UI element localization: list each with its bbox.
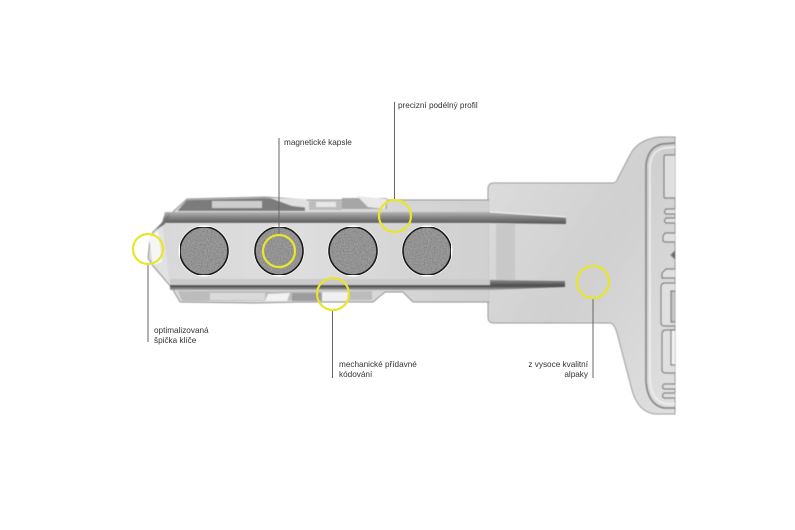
key illustration xyxy=(148,137,675,414)
callout: magnetické kapsle xyxy=(263,138,352,267)
lower groove xyxy=(170,280,565,290)
callout: z vysoce kvalitní alpaky: z vysoce kvalitní xyxy=(528,360,589,369)
embossed markings xyxy=(661,155,675,398)
blade tip xyxy=(150,213,170,285)
callout: optimalizovaná špička klíče: optimalizovaná xyxy=(154,326,209,335)
callout: mechanické přídavné kódování: mechanické přídavné xyxy=(339,360,417,369)
callout: z vysoce kvalitní alpaky: alpaky xyxy=(564,370,589,379)
callout: precizní podélný profil xyxy=(379,101,478,232)
key blade xyxy=(148,196,566,303)
magnetic capsules xyxy=(178,226,452,276)
callout: mechanické přídavné kódování: kódování xyxy=(339,370,373,379)
upper groove xyxy=(162,212,566,224)
callout: magnetické kapsle: magnetické kapsle xyxy=(284,138,352,147)
lower edge relief xyxy=(178,291,372,301)
inner rim of bow xyxy=(646,143,675,408)
callout: z vysoce kvalitní alpaky xyxy=(528,266,609,379)
top edge relief xyxy=(178,198,305,211)
key bow xyxy=(488,137,675,414)
callout: optimalizovaná špička klíče: špička klíče xyxy=(154,336,197,345)
callout: precizní podélný profil: precizní podélný profil xyxy=(398,101,478,110)
callout: mechanické přídavné kódování xyxy=(317,278,417,379)
callout: optimalizovaná špička klíče xyxy=(133,234,209,345)
